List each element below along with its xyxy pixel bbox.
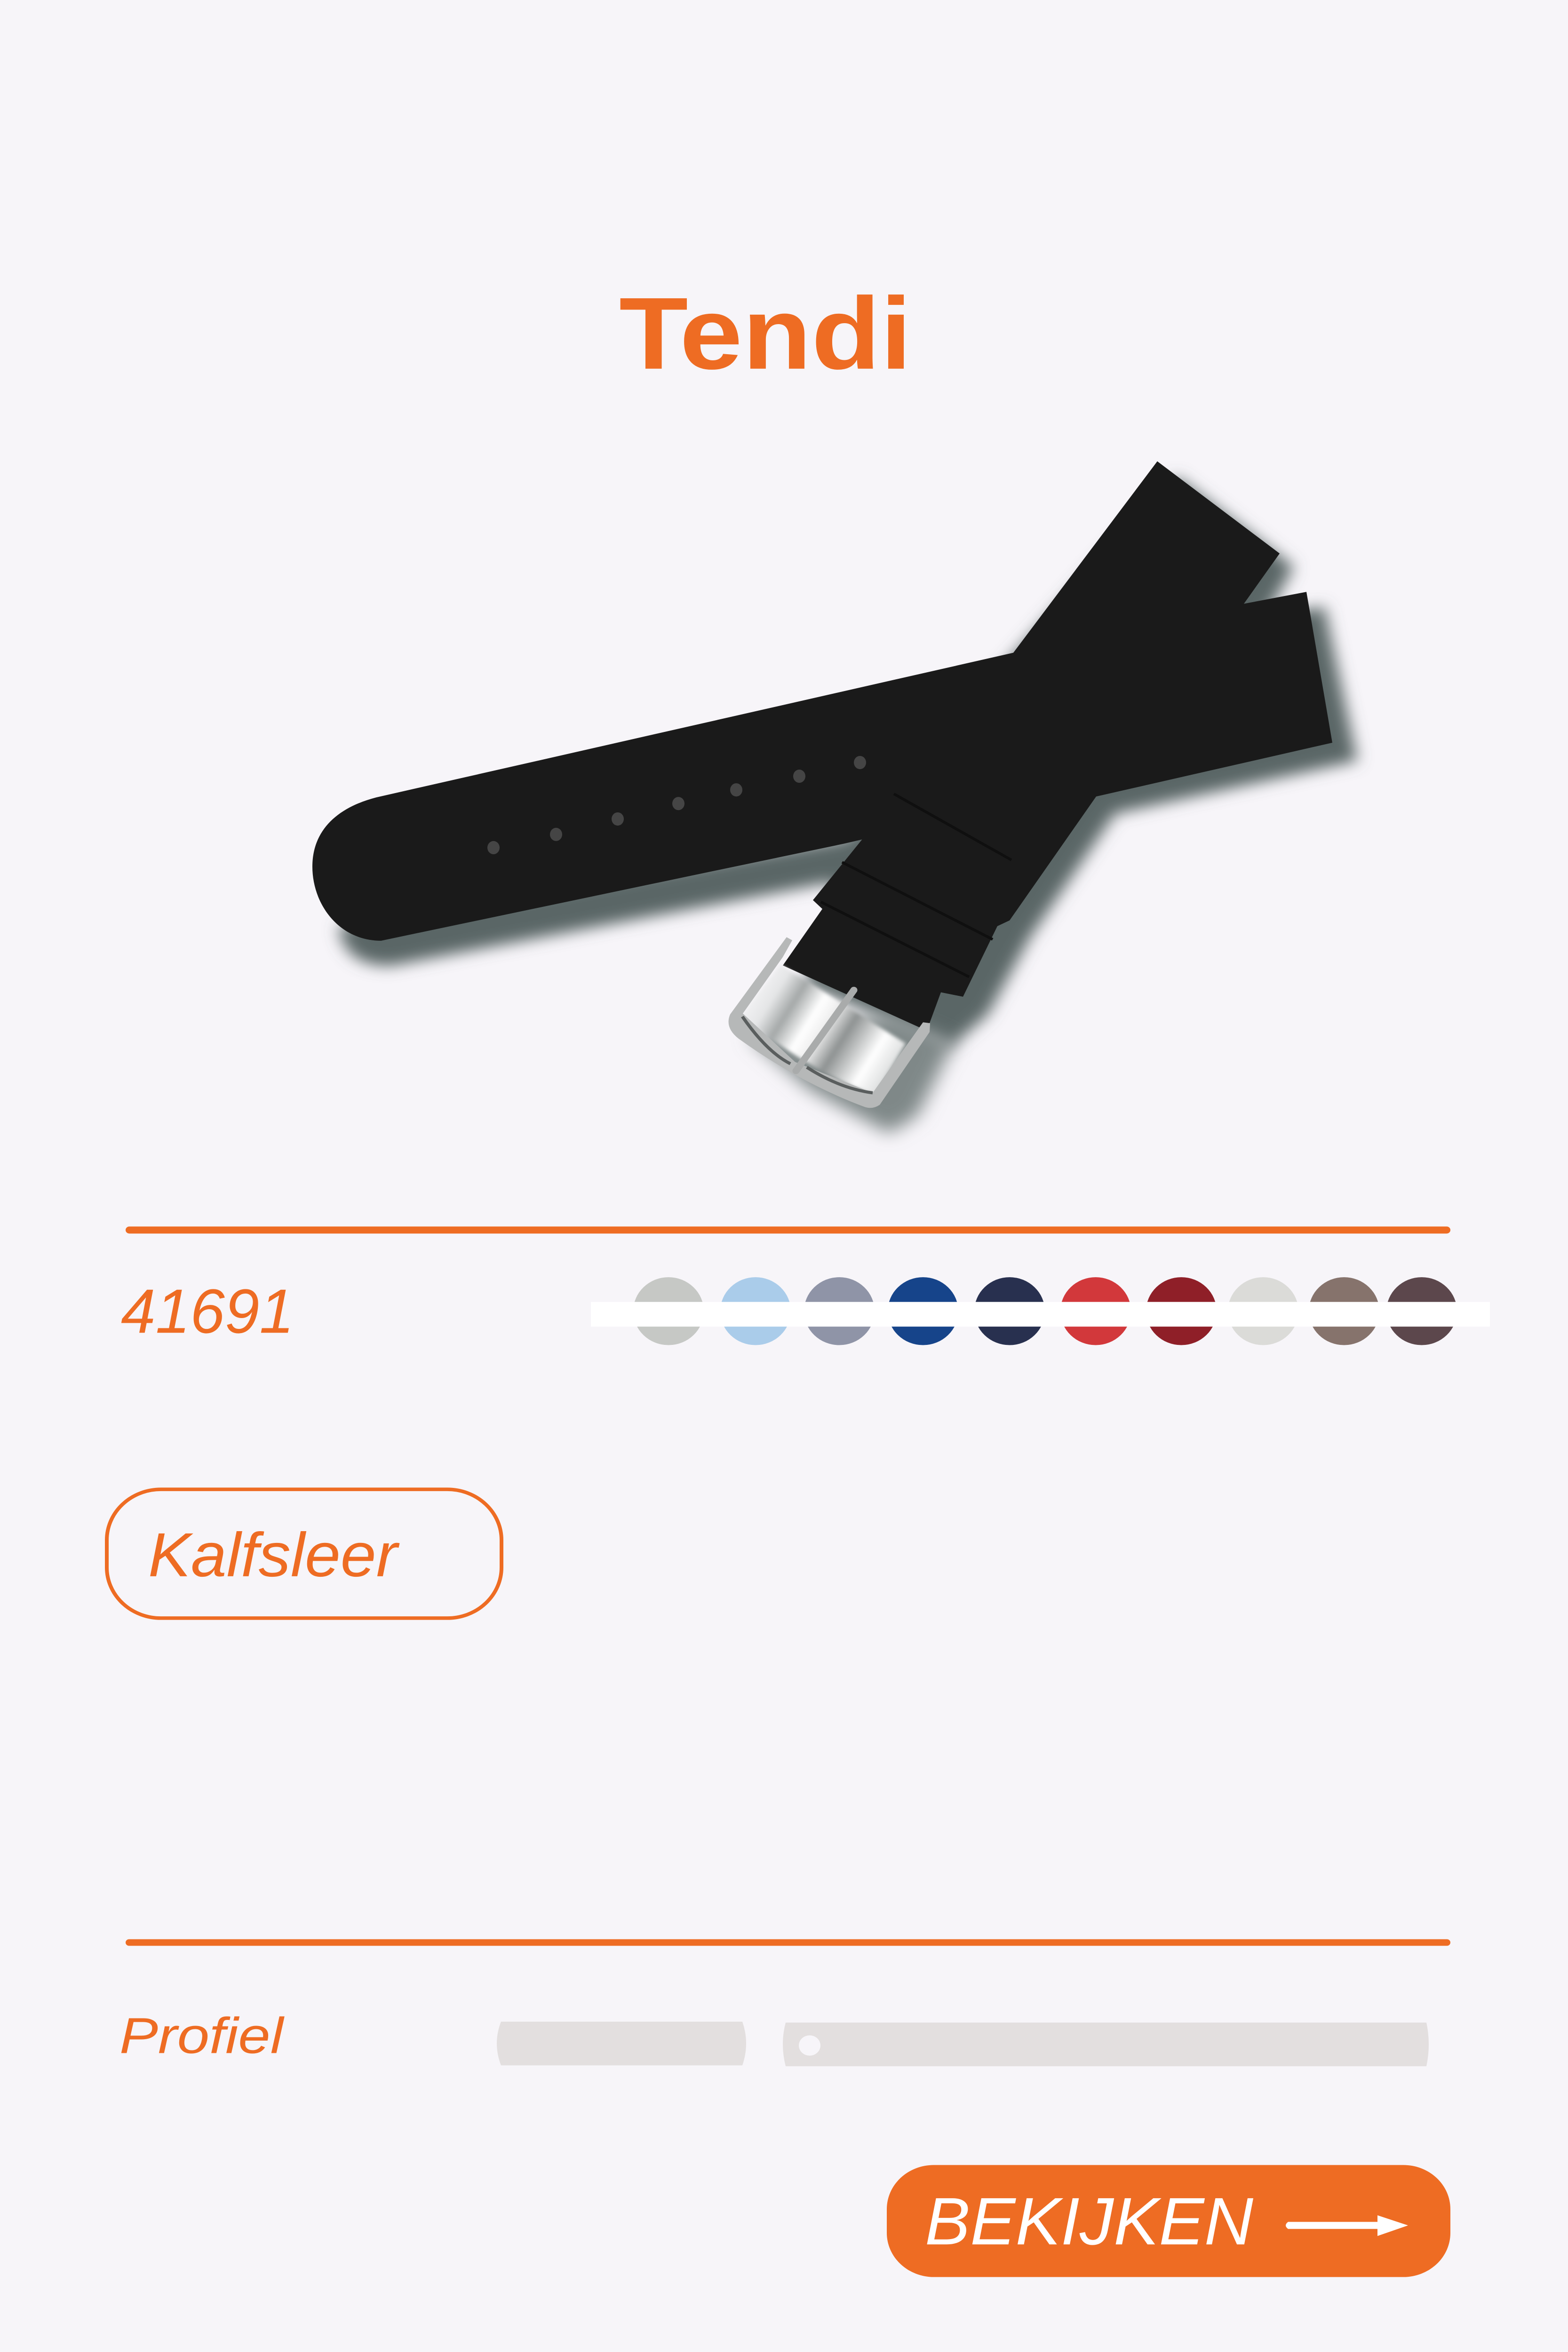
- divider bottom: [126, 1939, 1450, 1946]
- buckle pin: [796, 990, 854, 1071]
- tail strap: [312, 653, 1082, 941]
- buckle plate: [741, 964, 906, 1096]
- button: [887, 2165, 1450, 2277]
- article number: 41691: [121, 1276, 294, 1346]
- arrow: [1286, 2215, 1408, 2236]
- colour swatches: [633, 1277, 1457, 1345]
- main strap with keeper: [783, 461, 1332, 1031]
- buckle frame: [729, 937, 930, 1108]
- button label: BEKIJKEN: [925, 2185, 1254, 2259]
- buckle shadow: [748, 1014, 955, 1134]
- material tag: [107, 1489, 501, 1618]
- material label: Kalfsleer: [148, 1520, 400, 1589]
- divider top: [126, 1226, 1450, 1233]
- strap shadow: [339, 477, 1357, 1048]
- white band over swatches: [591, 1302, 1490, 1327]
- watch strap photo: [312, 461, 1357, 1134]
- keeper creases: [821, 794, 1011, 977]
- profile icon: strap buckle side: [497, 2022, 746, 2066]
- strap holes: [487, 756, 866, 854]
- profile label: Profiel: [119, 2007, 285, 2064]
- title: Tendi: [619, 276, 912, 390]
- buckle: [729, 937, 930, 1108]
- profile icon: strap hole side: [783, 2023, 1429, 2066]
- buckle inner edge: [742, 1017, 873, 1093]
